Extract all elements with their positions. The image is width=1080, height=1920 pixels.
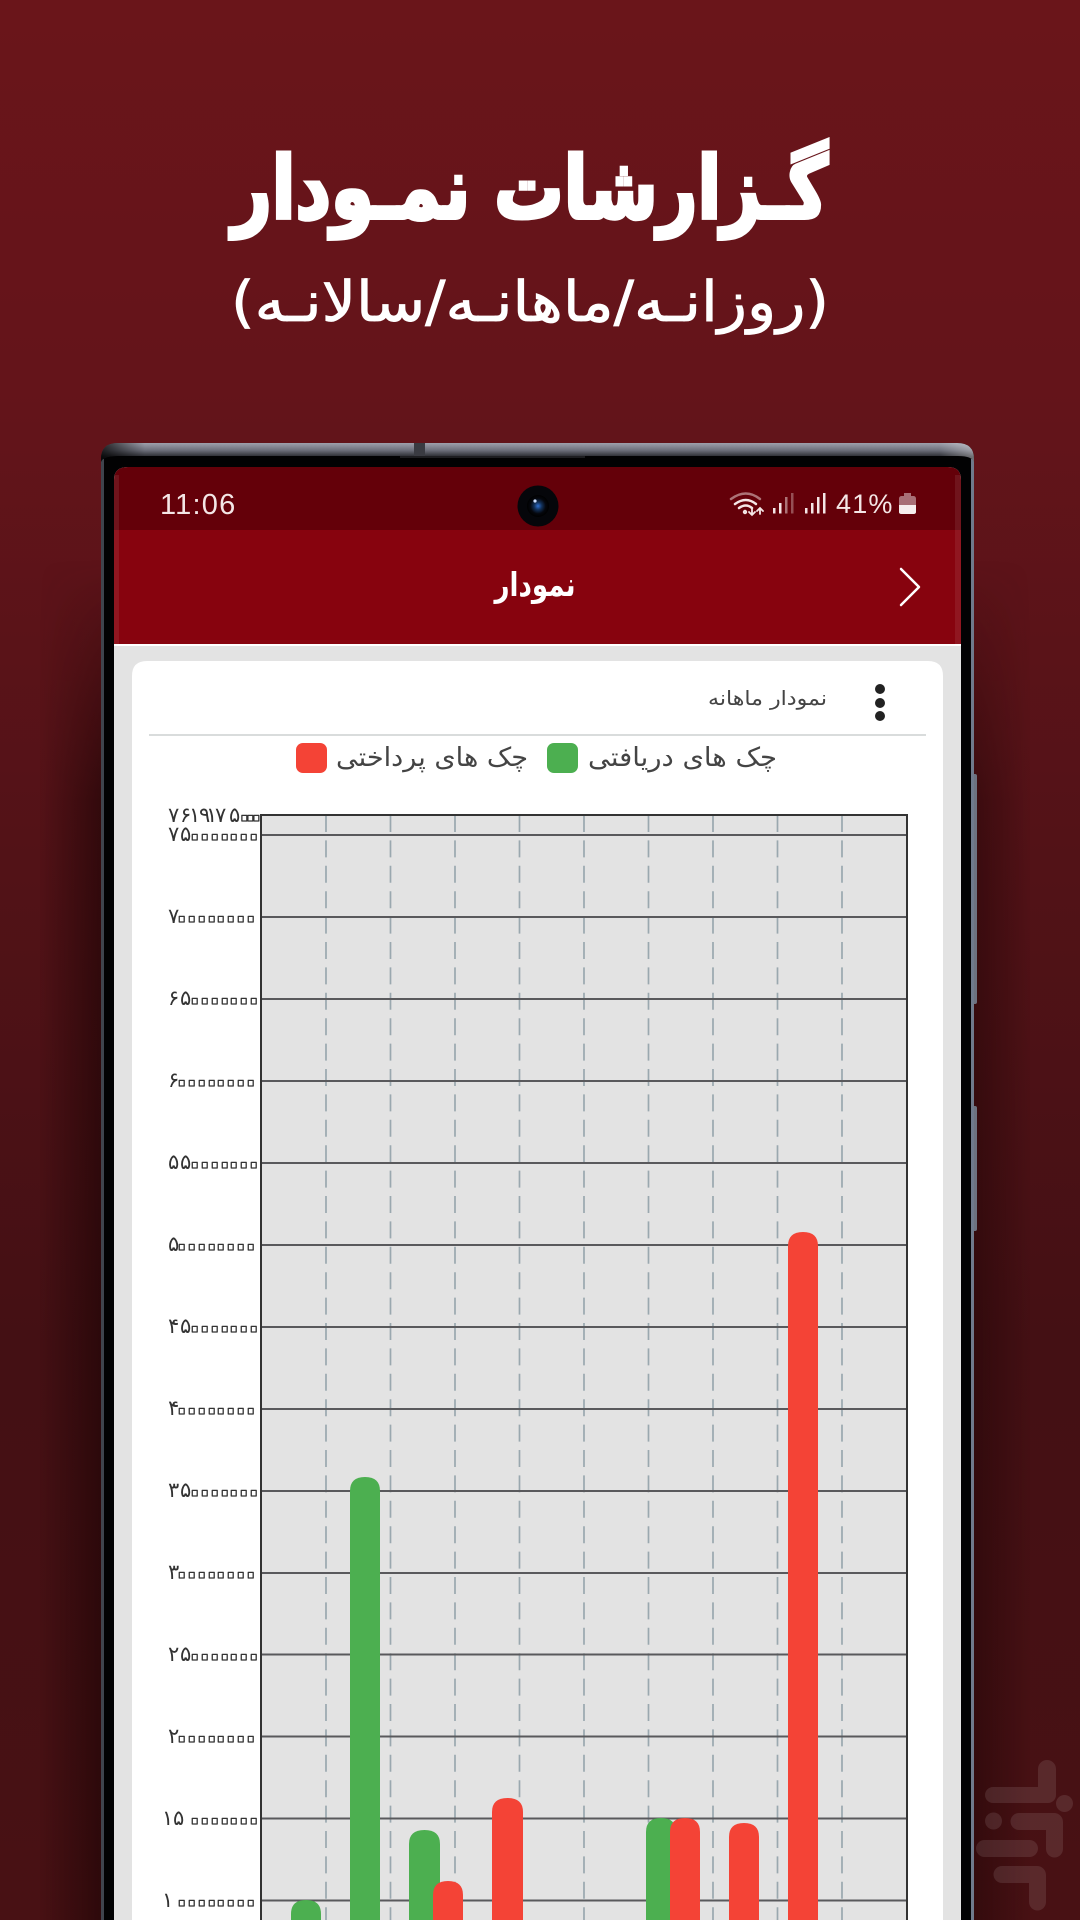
y axis labels: ۴ xyxy=(168,1396,179,1420)
y axis labels: ۶ xyxy=(168,1068,179,1092)
title: گـزارشات نمـودار xyxy=(229,139,829,239)
y axis labels: ۰۰۰ xyxy=(232,788,269,842)
icon: signal 1 xyxy=(773,493,794,514)
y axis labels: ۷ xyxy=(168,904,179,928)
app bar title: نمودار xyxy=(493,565,576,605)
bar chart xyxy=(261,815,907,1920)
y axis labels: ۳۵ xyxy=(168,1478,191,1502)
y axis labels: ۱۵ xyxy=(162,1806,184,1830)
panel: chart card xyxy=(132,661,943,1920)
card heading: نمودار ماهانه xyxy=(708,686,827,710)
phone mockup xyxy=(101,443,977,1920)
y axis labels: ۰۰۰۰۰۰۰ xyxy=(182,1791,266,1845)
y axis labels: ۰۰۰۰۰۰۰۰ xyxy=(169,1545,263,1599)
y axis labels: ۰۰۰۰۰۰۰ xyxy=(182,1299,266,1353)
icon: battery xyxy=(899,493,916,514)
y axis labels: ۷۵ xyxy=(168,822,191,846)
y axis labels: ۶۵ xyxy=(168,986,191,1010)
screen xyxy=(114,467,961,1920)
bars: received cheques xyxy=(291,1477,676,1920)
icon: back chevron xyxy=(901,569,919,605)
y axis labels: ۰۰۰۰۰۰۰ xyxy=(182,1135,266,1189)
legend: received: چک های دریافتی xyxy=(588,743,777,773)
y axis labels: ۰۰۰۰۰۰۰ xyxy=(182,971,266,1025)
y axis labels: ۰۰۰۰۰۰۰۰ xyxy=(169,1053,263,1107)
y axis labels: ۵ xyxy=(168,1232,179,1256)
y axis labels: ۲ xyxy=(168,1724,179,1748)
y axis labels: ۰۰۰۰۰۰۰۰ xyxy=(169,889,263,943)
y axis labels: ۳ xyxy=(168,1560,179,1584)
y axis labels: ۰۰۰۰۰۰۰ xyxy=(182,1463,266,1517)
legend: paid: چک های پرداختی xyxy=(336,743,528,773)
y axis labels: ۷۶۱۹۱۷۵ xyxy=(168,803,240,827)
y axis labels: ۲۵ xyxy=(168,1642,191,1666)
y axis labels: ۰۰۰۰۰۰۰ xyxy=(182,807,266,861)
phone side buttons xyxy=(972,774,977,1231)
app bar xyxy=(114,530,961,646)
legend xyxy=(296,743,777,773)
screen edge highlights xyxy=(114,475,961,644)
status bar xyxy=(114,467,961,530)
battery percent: 41% xyxy=(836,489,894,519)
bars: paid cheques xyxy=(433,1232,818,1920)
phone body xyxy=(101,443,974,1920)
y axis labels: ۵۵ xyxy=(168,1150,191,1174)
y axis labels: ۰۰۰۰۰۰۰۰ xyxy=(169,1381,263,1435)
subtitle: (روزانـه/ماهانـه/سالانـه) xyxy=(231,270,829,335)
icon: bazaar watermark xyxy=(976,1760,1073,1910)
clock: 11:06 xyxy=(160,489,236,521)
y axis labels: ۰۰۰۰۰۰۰۰ xyxy=(169,1709,263,1763)
y axis labels xyxy=(162,788,269,1920)
icon: front camera xyxy=(518,486,558,526)
icon: wifi xyxy=(731,494,763,515)
icon: signal 2 xyxy=(805,493,826,514)
y axis labels: ۴۵ xyxy=(168,1314,191,1338)
icon: overflow menu xyxy=(875,684,885,721)
y axis labels: ۰۰۰۰۰۰۰ xyxy=(182,1627,266,1681)
y axis labels: ۰۰۰۰۰۰۰۰ xyxy=(169,1217,263,1271)
y axis labels: ۱ xyxy=(162,1888,173,1912)
